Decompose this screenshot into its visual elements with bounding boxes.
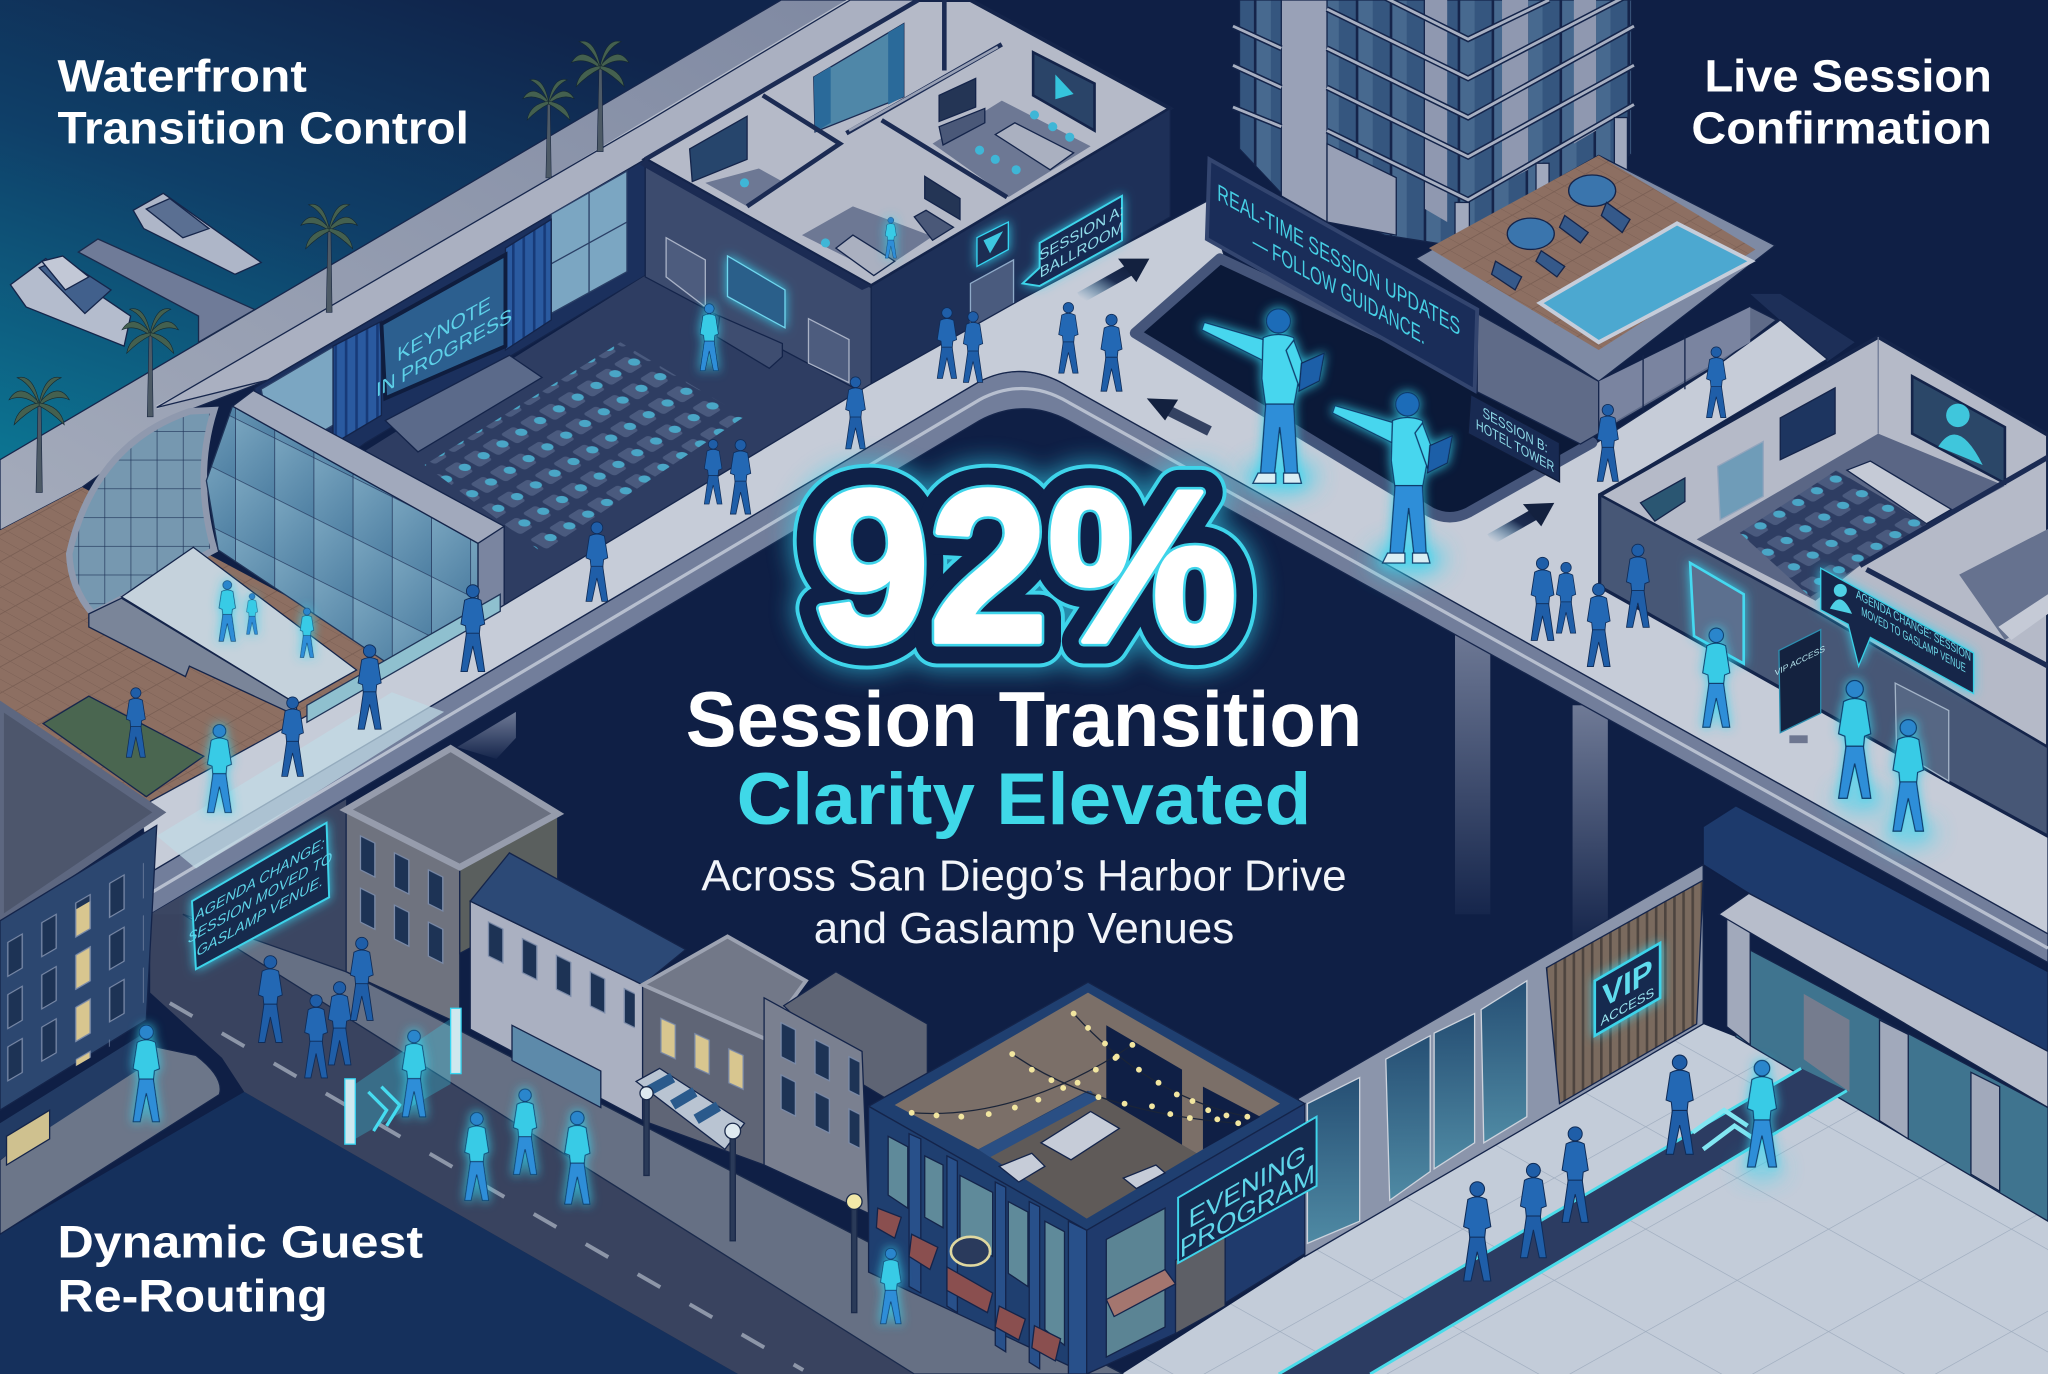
loungers (1492, 202, 1630, 290)
label: waterfront transition control (57, 50, 469, 154)
panel: pool deck (1416, 155, 1775, 381)
tan building (346, 748, 558, 1024)
people: walkers (126, 302, 1726, 1281)
right facade (1087, 1104, 1305, 1374)
callout: session a (1023, 196, 1124, 286)
sidewalk (183, 914, 1123, 1374)
play screen (1033, 52, 1095, 131)
label: waterfront transition control: Waterfront (57, 50, 307, 101)
corner window (1106, 1208, 1165, 1357)
top beam (232, 391, 504, 549)
table (1847, 461, 1951, 524)
grey building (643, 936, 806, 1165)
door (970, 260, 1014, 337)
room floor (1697, 434, 2005, 601)
direction tile (977, 222, 1008, 266)
string lights (912, 1014, 1247, 1123)
under-bridge ground (150, 799, 346, 972)
glass railing (307, 594, 500, 722)
wall left (1298, 865, 1703, 1256)
evening program sign (1178, 1117, 1317, 1264)
lane dashes (170, 1003, 803, 1370)
door (1895, 683, 1949, 781)
vip sign: ACCESS (1601, 984, 1654, 1029)
panel: real-time banner: — FOLLOW GUIDANCE. (1253, 228, 1425, 350)
label: dynamic guest re-routing: Dynamic Guest (57, 1217, 423, 1268)
evening program sign: EVENING (1189, 1138, 1306, 1234)
screen: IN PROGRESS (376, 304, 512, 402)
counter (717, 316, 782, 368)
sign oval (951, 1237, 990, 1266)
side room floor (1959, 529, 2048, 640)
agenda sign: SESSION MOVED TO (188, 849, 332, 947)
curtains (333, 321, 381, 444)
lawn (43, 696, 204, 797)
doors (666, 238, 849, 383)
hero stat: 92%: 92% (811, 445, 1237, 687)
partitions (1860, 457, 2048, 666)
ground block (0, 1092, 738, 1374)
canopy (1719, 893, 2048, 1108)
floor (978, 1091, 1196, 1219)
agenda callout: AGENDA CHANGE: SESSION (1856, 587, 1971, 664)
side wall (645, 159, 871, 397)
tables (999, 1111, 1165, 1189)
arrow: back (1147, 398, 1209, 431)
floor (366, 276, 871, 607)
tower pillars (1455, 118, 1627, 278)
panel: glass atrium (69, 391, 504, 716)
restaurant (869, 982, 1317, 1374)
agenda callout (1821, 568, 1974, 694)
left building (0, 705, 159, 1165)
label: dynamic guest re-routing: Re-Routing (57, 1270, 328, 1321)
callout: session a: SESSION A: (1039, 201, 1124, 265)
evening program sign: PROGRAM (1180, 1158, 1315, 1264)
panel: keynote room (255, 159, 871, 607)
room screens and boards (690, 78, 976, 219)
vip stand: VIP ACCESS (1775, 643, 1825, 678)
agenda sign: AGENDA CHANGE: (194, 835, 325, 925)
entry floor (121, 547, 357, 704)
audience seating (424, 342, 744, 552)
road (150, 914, 914, 1374)
panel: right rooms (1600, 337, 2048, 836)
facade pillars (909, 1134, 1087, 1374)
left glazing (261, 346, 334, 460)
vip sign: VIP (1602, 952, 1653, 1016)
tall building (764, 972, 927, 1213)
curtain panel (1546, 880, 1703, 1104)
arrow: to ballroom (1080, 259, 1149, 298)
info wall screen (728, 256, 785, 328)
glass panes (1307, 981, 1527, 1243)
glow pools under guides (1243, 458, 1936, 1178)
lit door (1690, 563, 1744, 663)
label: dynamic guest re-routing (57, 1217, 423, 1321)
panel: hotel tower (1233, 0, 1634, 278)
boat: speedboat (133, 193, 261, 274)
callout: session b (1468, 394, 1560, 482)
subtitle (701, 853, 1347, 953)
label: live session confirmation (1691, 50, 1992, 154)
dock (78, 239, 255, 342)
heading: clarity elevated: Clarity Elevated (737, 759, 1311, 840)
panel: vip storefront (1122, 806, 2048, 1374)
light gate (345, 1008, 461, 1144)
subtitle: Across San Diego’s Harbor Drive (701, 853, 1347, 901)
panel: real-time banner: REAL-TIME SESSION UPDATES (1217, 179, 1460, 341)
agenda sign (188, 823, 332, 969)
screen: KEYNOTE (397, 293, 491, 367)
label: waterfront transition control: Transition Control (57, 103, 469, 154)
street lamps (640, 1087, 862, 1313)
callout: session b: SESSION B: (1482, 405, 1548, 457)
void opening (1135, 259, 1592, 517)
pool (1540, 223, 1752, 342)
deck (140, 201, 2048, 934)
upper navy block (1703, 806, 2048, 1055)
facade windows (888, 1136, 1064, 1345)
people: guides highlighted (133, 217, 1924, 1324)
subtitle: and Gaslamp Venues (814, 905, 1234, 953)
umbrellas (1507, 175, 1616, 249)
navy outer edge (1750, 294, 1855, 362)
info board (1780, 388, 1835, 460)
panel: bridge walkway (140, 201, 2048, 963)
wood deck (0, 487, 418, 816)
presenter screen (1912, 376, 2005, 483)
curb corner (0, 1045, 220, 1234)
callout: session a: BALLROOM (1040, 218, 1123, 282)
panel: real-time banner (1207, 159, 1477, 391)
palm trees (9, 41, 629, 492)
seated guests (1740, 470, 1927, 597)
panel: under-bridge pillars (457, 627, 1608, 940)
left facade (869, 1106, 1087, 1374)
panel: upper meeting rooms (640, 0, 1170, 397)
panel: waterfront (0, 0, 918, 816)
tables and counters (836, 108, 1074, 276)
hero stat: 92%: 92% (811, 445, 1237, 687)
corner line (1877, 337, 1879, 434)
screen (376, 255, 512, 402)
floor chevrons (1693, 1110, 1758, 1149)
agenda sign: GASLAMP VENUE. (197, 873, 323, 961)
agenda callout: MOVED TO GASLAMP VENUE (1861, 604, 1966, 675)
partition walls (645, 0, 1007, 206)
night windows (1106, 1025, 1182, 1160)
floors (705, 101, 1091, 273)
label: live session confirmation: Confirmation (1691, 103, 1992, 154)
outer wall (871, 108, 1170, 397)
white building (470, 853, 686, 1121)
hero stat: 92%: 92% (811, 445, 1237, 687)
rail (150, 371, 2048, 963)
door (1718, 441, 1763, 520)
callout: session b: HOTEL TOWER (1476, 417, 1554, 476)
back wall (255, 159, 645, 522)
vip stand (1775, 630, 1825, 743)
panel: street level (0, 705, 1317, 1374)
marble floor (1122, 1024, 2048, 1374)
back walls (895, 993, 1088, 1149)
promenade sidewalk (0, 0, 918, 530)
hero stat: 92%: 92% (811, 445, 1237, 687)
small board (1640, 478, 1685, 521)
panel: tower underside (1477, 307, 1776, 444)
right storefront (1732, 940, 2048, 1221)
vip sign (1595, 943, 1660, 1036)
hero stat: 92%: 92% (811, 445, 1237, 687)
window with curtains (814, 24, 904, 132)
heading: session transition: Session Transition (686, 675, 1362, 763)
roof frame (869, 982, 1305, 1230)
front wall (1600, 495, 2048, 836)
right glazing (551, 171, 627, 313)
boat: yacht (10, 256, 131, 346)
arrow: to hotel tower (1490, 503, 1554, 539)
restaurant awnings (876, 1208, 1061, 1361)
carpet (1279, 1068, 1847, 1374)
stage (385, 355, 542, 452)
label: live session confirmation: Live Session (1704, 50, 1992, 101)
striped awning (636, 1068, 744, 1149)
seated figures (744, 115, 1070, 243)
